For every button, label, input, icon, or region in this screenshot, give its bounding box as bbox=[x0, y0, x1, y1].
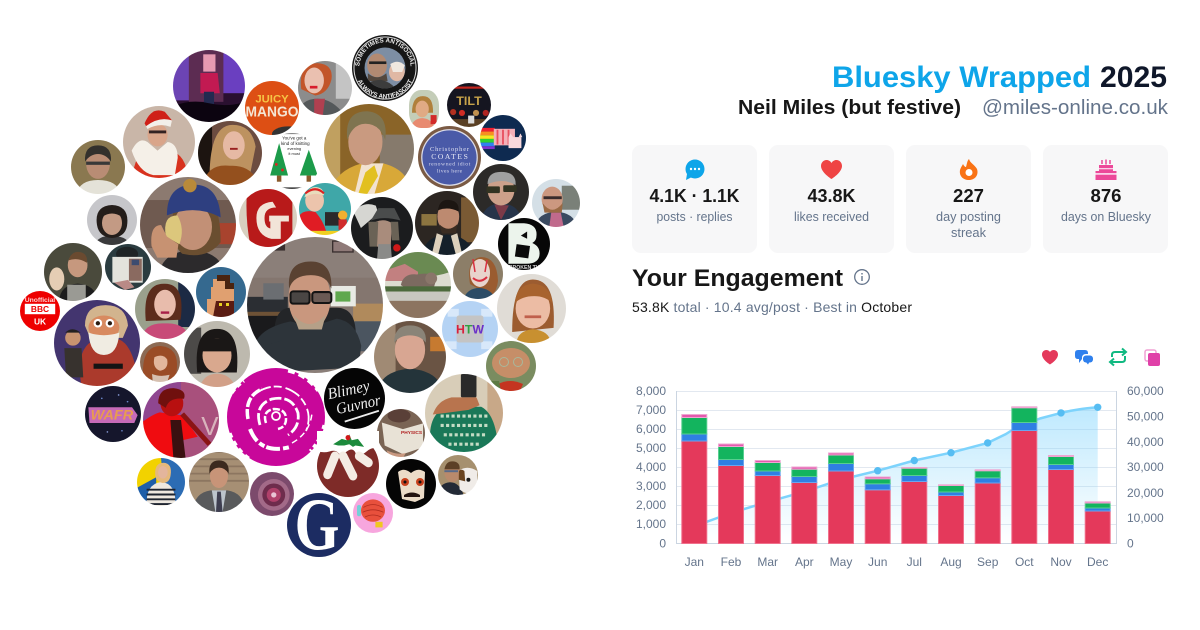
month labels: Mar bbox=[757, 555, 778, 569]
icon: likes heart bbox=[1042, 350, 1058, 364]
month labels: Jul bbox=[907, 555, 922, 569]
combo chart: monthly engagement bbox=[636, 384, 1164, 569]
stat card: day posting streak: 227 bbox=[953, 186, 984, 206]
avatar: red lit singer bbox=[143, 382, 219, 458]
avatar: Christmas tree card: kind of knitting bbox=[281, 141, 310, 146]
month labels: Feb bbox=[721, 555, 742, 569]
chart grid bbox=[676, 391, 1116, 544]
stat card: posts and replies: 4.1K · 1.1K bbox=[650, 186, 740, 206]
avatar: comedian on purple stage bbox=[173, 50, 245, 122]
stat card: likes received bbox=[769, 145, 894, 253]
avatar: green Christmas jumper selfie bbox=[425, 374, 503, 452]
avatar: Nyan cat bbox=[480, 115, 526, 161]
left axis labels: 1,000 bbox=[636, 517, 666, 531]
month labels: Sep bbox=[977, 555, 999, 569]
month labels: Dec bbox=[1087, 555, 1108, 569]
left axis labels: 8,000 bbox=[636, 384, 666, 398]
avatar: Sometimes Antisocial badge: ALWAYS ANTIFASCIST bbox=[358, 78, 412, 98]
avatar: WAFR logo bbox=[85, 386, 141, 442]
avatar: brunette woman bbox=[135, 279, 195, 339]
left axis labels: 0 bbox=[659, 536, 666, 550]
left axis labels: 4,000 bbox=[636, 460, 666, 474]
stat card: posts and replies: posts · replies bbox=[656, 210, 732, 224]
avatar: reading a physics book: PHYSICS bbox=[401, 430, 422, 436]
icon: reposts arrows bbox=[1110, 348, 1126, 366]
avatar: pixel art figure bbox=[196, 267, 246, 317]
right axis labels bbox=[1127, 384, 1164, 550]
avatar: beanie man, thumbs up bbox=[140, 177, 236, 273]
avatar: festive TILT sign: TILT bbox=[456, 94, 482, 108]
right axis labels: 50,000 bbox=[1127, 410, 1164, 424]
avatar: Unofficial BBC UK: BBC bbox=[31, 304, 49, 314]
avatar: small woman with red drink bbox=[409, 90, 439, 128]
stat card: day posting streak bbox=[906, 145, 1031, 253]
avatar: Christmas tree card bbox=[270, 133, 317, 189]
month labels: Nov bbox=[1050, 555, 1072, 569]
stat card: day posting streak: day posting bbox=[936, 210, 1001, 224]
avatar: Christmas tree card: evening bbox=[287, 146, 301, 151]
avatar: man with statue and chalkboard bbox=[44, 243, 102, 301]
left axis labels: 6,000 bbox=[636, 422, 666, 436]
engagement summary: 53.8K total · 10.4 avg/post · Best in October bbox=[632, 299, 912, 315]
avatar: gingerbread painting bbox=[486, 341, 536, 391]
avatar: blue plaque Christopher Coates: COATES bbox=[431, 152, 468, 161]
avatar: red haired woman in grey bbox=[298, 61, 352, 115]
stat card: posts and replies bbox=[632, 145, 757, 253]
stat card: likes received: likes received bbox=[794, 210, 869, 224]
title: Bluesky Wrapped bbox=[832, 61, 1091, 94]
avatar: Juicy Mango: JUICY bbox=[255, 94, 289, 106]
user name and handle bbox=[738, 97, 1169, 119]
month labels: Oct bbox=[1015, 555, 1034, 569]
avatar: Christmas tree card: it must bbox=[288, 151, 301, 156]
avatar: holding a book bbox=[105, 244, 151, 290]
title: 2025 bbox=[1100, 61, 1167, 94]
avatar: WAFR logo: WAFR bbox=[91, 408, 133, 423]
month labels: Apr bbox=[795, 555, 814, 569]
left axis labels: 2,000 bbox=[636, 498, 666, 512]
right axis labels: 0 bbox=[1127, 536, 1134, 550]
avatar: main profile portrait bbox=[247, 237, 383, 373]
avatar: Juicy Mango bbox=[245, 81, 299, 135]
avatar: Unofficial BBC UK: Unofficial bbox=[25, 297, 55, 304]
stat card: likes received: 43.8K bbox=[808, 186, 856, 206]
avatar: blonde woman bbox=[198, 121, 262, 185]
avatar: headphone brain bbox=[353, 493, 393, 533]
avatar: Pennywise face paint bbox=[453, 249, 503, 299]
avatar: Blimey Guvnor: Guvnor bbox=[335, 392, 383, 418]
avatar: man in yellow blazer bbox=[324, 104, 414, 194]
avatar: blue plaque Christopher Coates: Christopher bbox=[430, 146, 470, 153]
avatar: vampire face bbox=[386, 459, 436, 509]
left axis labels: 7,000 bbox=[636, 403, 666, 417]
avatar: reading a physics book bbox=[377, 409, 425, 457]
avatar: spiral staircase bbox=[250, 472, 294, 516]
month labels: Jan bbox=[685, 555, 704, 569]
icon: replies speech bubbles bbox=[1075, 350, 1093, 364]
left axis labels bbox=[636, 384, 666, 550]
cumulative area and line bbox=[694, 404, 1101, 544]
month labels: May bbox=[830, 555, 852, 569]
stat card: days on Bluesky bbox=[1043, 145, 1168, 253]
avatar: Christmas pudding logo bbox=[317, 431, 379, 497]
avatar: woman in red dress with clown bbox=[299, 183, 351, 235]
avatar: Christmas tree card: You've got a bbox=[282, 136, 307, 141]
right axis labels: 60,000 bbox=[1127, 384, 1164, 398]
icon: quotes copy squares bbox=[1145, 350, 1160, 366]
user name and handle: @miles-online.co.uk bbox=[982, 97, 1169, 119]
heading: Your Engagement: Your Engagement bbox=[632, 265, 843, 292]
month labels: Aug bbox=[940, 555, 962, 569]
avatar: bald bearded man with glasses bbox=[532, 179, 580, 227]
avatar: curly dark hair man bbox=[87, 195, 137, 245]
avatar: man in dark sweater bbox=[374, 321, 446, 393]
right axis labels: 30,000 bbox=[1127, 460, 1164, 474]
avatar: red haired woman, small bbox=[140, 342, 180, 382]
avatar: big red G sign bbox=[239, 189, 297, 247]
icon: info bbox=[855, 270, 869, 284]
avatar: boy with bowl cut bbox=[497, 274, 566, 343]
avatar: man with dog bbox=[438, 455, 478, 495]
avatar: Santa bbox=[123, 106, 195, 178]
avatar: red lit singer: V bbox=[201, 413, 219, 441]
avatar: magenta swirl bbox=[227, 368, 325, 466]
left axis labels: 3,000 bbox=[636, 479, 666, 493]
avatar: blue plaque Christopher Coates: lives here bbox=[437, 169, 463, 175]
avatar: man in grey suit bbox=[189, 452, 249, 512]
avatar: Unofficial BBC UK: UK bbox=[34, 317, 46, 327]
avatar: man with glasses bbox=[71, 140, 125, 194]
avatar: blue plaque Christopher Coates bbox=[418, 126, 481, 189]
avatar: B logo bbox=[498, 218, 550, 270]
month labels bbox=[685, 555, 1108, 569]
left axis labels: 5,000 bbox=[636, 441, 666, 455]
avatar: Unofficial BBC UK bbox=[20, 291, 60, 331]
avatar: Sometimes Antisocial badge bbox=[352, 35, 418, 101]
avatar: hat and white hand, dark figure bbox=[351, 197, 413, 259]
month labels: Jun bbox=[868, 555, 887, 569]
right axis labels: 40,000 bbox=[1127, 435, 1164, 449]
right axis labels: 10,000 bbox=[1127, 511, 1164, 525]
stat card: days on Bluesky: days on Bluesky bbox=[1061, 210, 1152, 224]
avatar: striped jumper woman bbox=[137, 458, 185, 506]
avatar bubble cluster bbox=[20, 35, 580, 557]
avatar: bearded man with leather jacket bbox=[415, 191, 479, 255]
stat card: days on Bluesky: 876 bbox=[1090, 186, 1122, 206]
avatar: woman with dark fringe bbox=[184, 321, 250, 387]
user name and handle: Neil Miles (but festive) bbox=[738, 97, 961, 119]
avatar: HTW logo: HTW bbox=[456, 322, 484, 336]
legend icons bbox=[1042, 348, 1160, 366]
avatar: man in thick black glasses bbox=[473, 164, 529, 220]
avatar: festive TILT sign bbox=[447, 83, 491, 127]
avatar: Santa puppet with Frank bbox=[54, 300, 140, 386]
avatar: Sometimes Antisocial badge: SOMETIMES ANTISOCIAL bbox=[355, 38, 415, 66]
avatar: Blimey Guvnor bbox=[324, 368, 385, 429]
avatar: blue plaque Christopher Coates: renowned idiot bbox=[429, 162, 471, 168]
stacked bars bbox=[682, 407, 1110, 544]
avatar: Blimey Guvnor: Blimey bbox=[326, 377, 372, 403]
avatar: cat on a fence bbox=[385, 252, 451, 318]
right axis labels: 20,000 bbox=[1127, 486, 1164, 500]
stat card: day posting streak: streak bbox=[951, 226, 987, 240]
avatar: HTW logo bbox=[442, 301, 498, 357]
